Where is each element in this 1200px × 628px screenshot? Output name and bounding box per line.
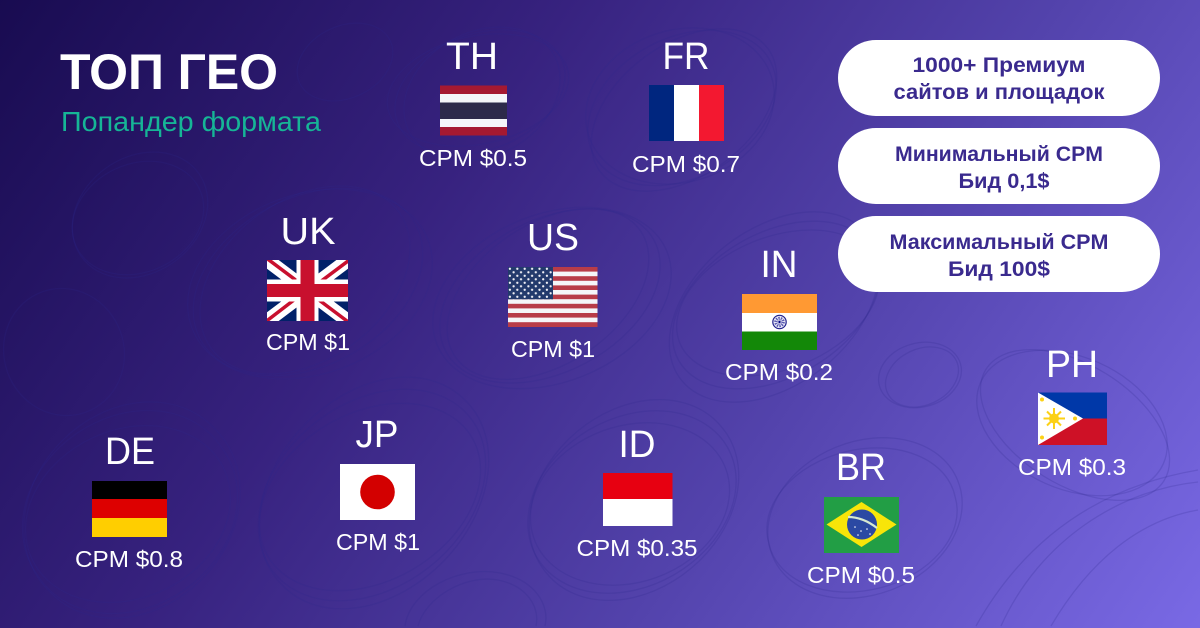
- country code TH: TH: [446, 36, 498, 78]
- panel: PH: [1018, 344, 1126, 480]
- flag: India: [742, 294, 817, 350]
- country code BR: BR: [836, 447, 886, 489]
- pill: maximum CPM: Максимальный CPM: [890, 231, 1108, 254]
- country code IN: IN: [760, 244, 798, 286]
- price BR: CPM $0.5: [807, 562, 915, 588]
- price IN: CPM $0.2: [725, 359, 833, 385]
- pill: maximum CPM: Бид 100$: [948, 258, 1050, 281]
- price PH: CPM $0.3: [1018, 454, 1126, 480]
- country code PH: PH: [1046, 344, 1098, 386]
- panel: JP: [336, 414, 420, 555]
- pill: minimum CPM: Бид 0,1$: [958, 170, 1050, 193]
- pill: premium sites: сайтов и площадок: [894, 81, 1105, 104]
- flag: Japan: [340, 464, 415, 520]
- country code FR: FR: [662, 36, 710, 78]
- pill: minimum CPM: [838, 128, 1160, 204]
- price FR: CPM $0.7: [632, 151, 740, 177]
- country code ID: ID: [618, 424, 656, 466]
- country code UK: UK: [280, 211, 336, 253]
- pill: minimum CPM: Минимальный CPM: [895, 143, 1103, 166]
- flag: Thailand: [440, 86, 507, 136]
- price UK: CPM $1: [266, 329, 350, 355]
- panel: DE: [75, 431, 183, 572]
- pill: maximum CPM: [838, 216, 1160, 292]
- price DE: CPM $0.8: [75, 546, 183, 572]
- country code JP: JP: [356, 414, 398, 456]
- country code US: US: [527, 217, 579, 259]
- flag: Germany: [92, 481, 167, 537]
- panel: feature pills: [838, 40, 1160, 292]
- flag: Indonesia: [603, 473, 672, 526]
- panel: BR: [807, 447, 915, 588]
- flag: Philippines: [1038, 392, 1107, 445]
- price US: CPM $1: [511, 336, 595, 362]
- country code DE: DE: [105, 431, 155, 473]
- price ID: CPM $0.35: [576, 535, 698, 561]
- flag: Brazil: [824, 497, 899, 553]
- flag: United Kingdom: [264, 257, 352, 324]
- panel: FR: [632, 36, 740, 177]
- panel: IN: [725, 244, 833, 385]
- panel: ID: [576, 424, 698, 561]
- price TH: CPM $0.5: [419, 145, 527, 171]
- pill: premium sites: 1000+ Премиум: [912, 54, 1086, 77]
- title: ТОП ГЕО: [60, 44, 278, 100]
- pill: premium sites: [838, 40, 1160, 116]
- panel: UK: [264, 211, 352, 355]
- flag: France: [649, 85, 724, 141]
- price JP: CPM $1: [336, 529, 420, 555]
- flag: United States: [508, 267, 598, 327]
- panel: TH: [419, 36, 527, 171]
- subtitle: Попандер формата: [61, 106, 321, 137]
- panel: US: [508, 217, 598, 362]
